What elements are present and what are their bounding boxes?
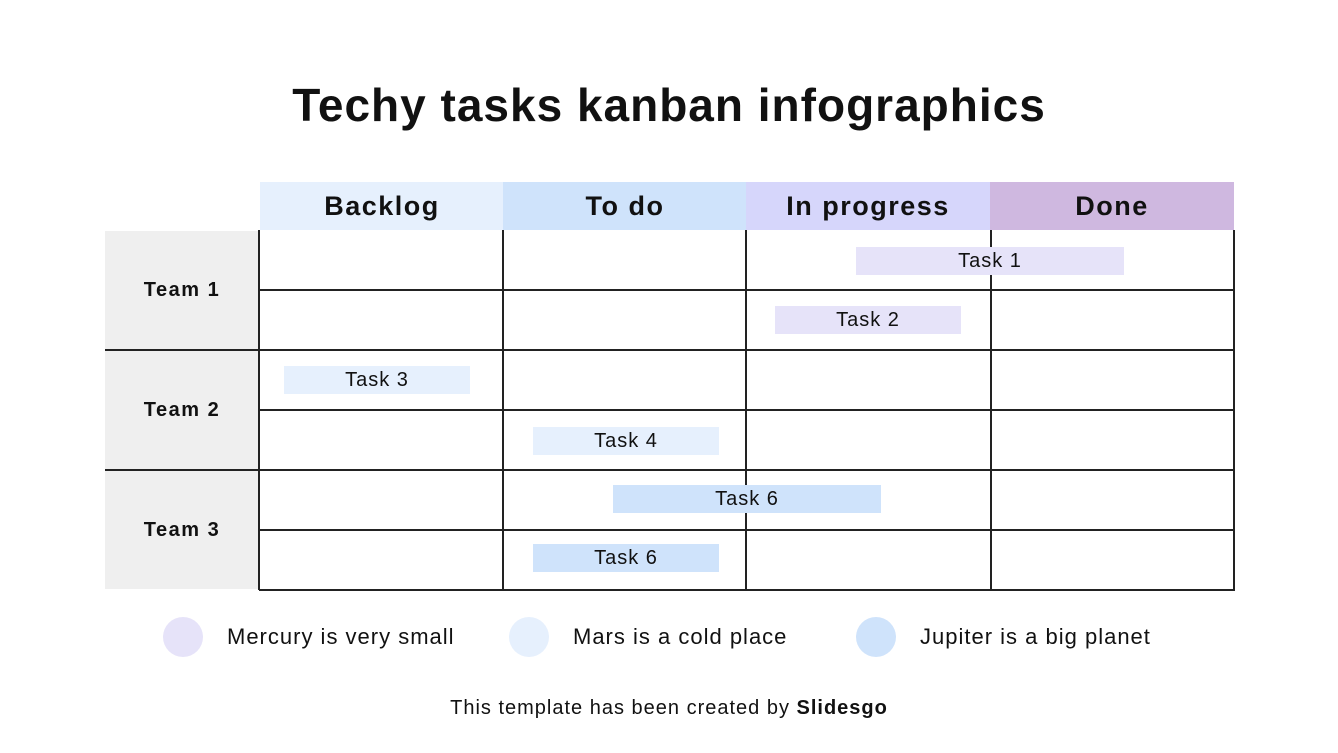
task 1: Task 1	[958, 250, 1022, 272]
header: To do	[503, 182, 747, 230]
task 2: Task 2	[836, 308, 900, 330]
header: To do: To do	[586, 190, 664, 220]
task 3	[284, 366, 470, 394]
legend: Mercury: Mercury is very small	[227, 624, 455, 649]
legend: Mercury	[163, 617, 455, 657]
team 1 label: Team 1	[144, 278, 220, 300]
title: Techy tasks kanban infographics	[292, 79, 1046, 131]
task 6 (short)	[533, 544, 719, 572]
team 1 label	[105, 231, 259, 349]
team 2 label: Team 2	[144, 398, 220, 420]
task 4: Task 4	[594, 430, 658, 452]
team 3 label: Team 3	[144, 518, 220, 540]
task 6 (short): Task 6	[594, 546, 658, 568]
footer credit: This template has been created by Slidesgo	[450, 697, 888, 719]
header: Backlog	[260, 182, 504, 230]
team 3 label	[105, 471, 259, 589]
task 2	[775, 306, 961, 334]
header: In progress	[746, 182, 990, 230]
task 4	[533, 427, 719, 455]
legend: Jupiter	[856, 617, 1151, 657]
header: Done	[990, 182, 1234, 230]
header: In progress: In progress	[786, 190, 950, 220]
header: Done: Done	[1075, 190, 1149, 220]
task 1	[856, 247, 1124, 275]
task 3: Task 3	[345, 368, 409, 390]
kanban table	[105, 182, 1235, 591]
team 2 label	[105, 351, 259, 469]
legend: Jupiter: Jupiter is a big planet	[920, 624, 1151, 649]
header: Backlog: Backlog	[324, 190, 440, 220]
legend: Mars	[509, 617, 787, 657]
legend: Mars: Mars is a cold place	[573, 624, 787, 649]
task 6 (long): Task 6	[715, 488, 779, 510]
task 6 (long)	[613, 485, 881, 513]
